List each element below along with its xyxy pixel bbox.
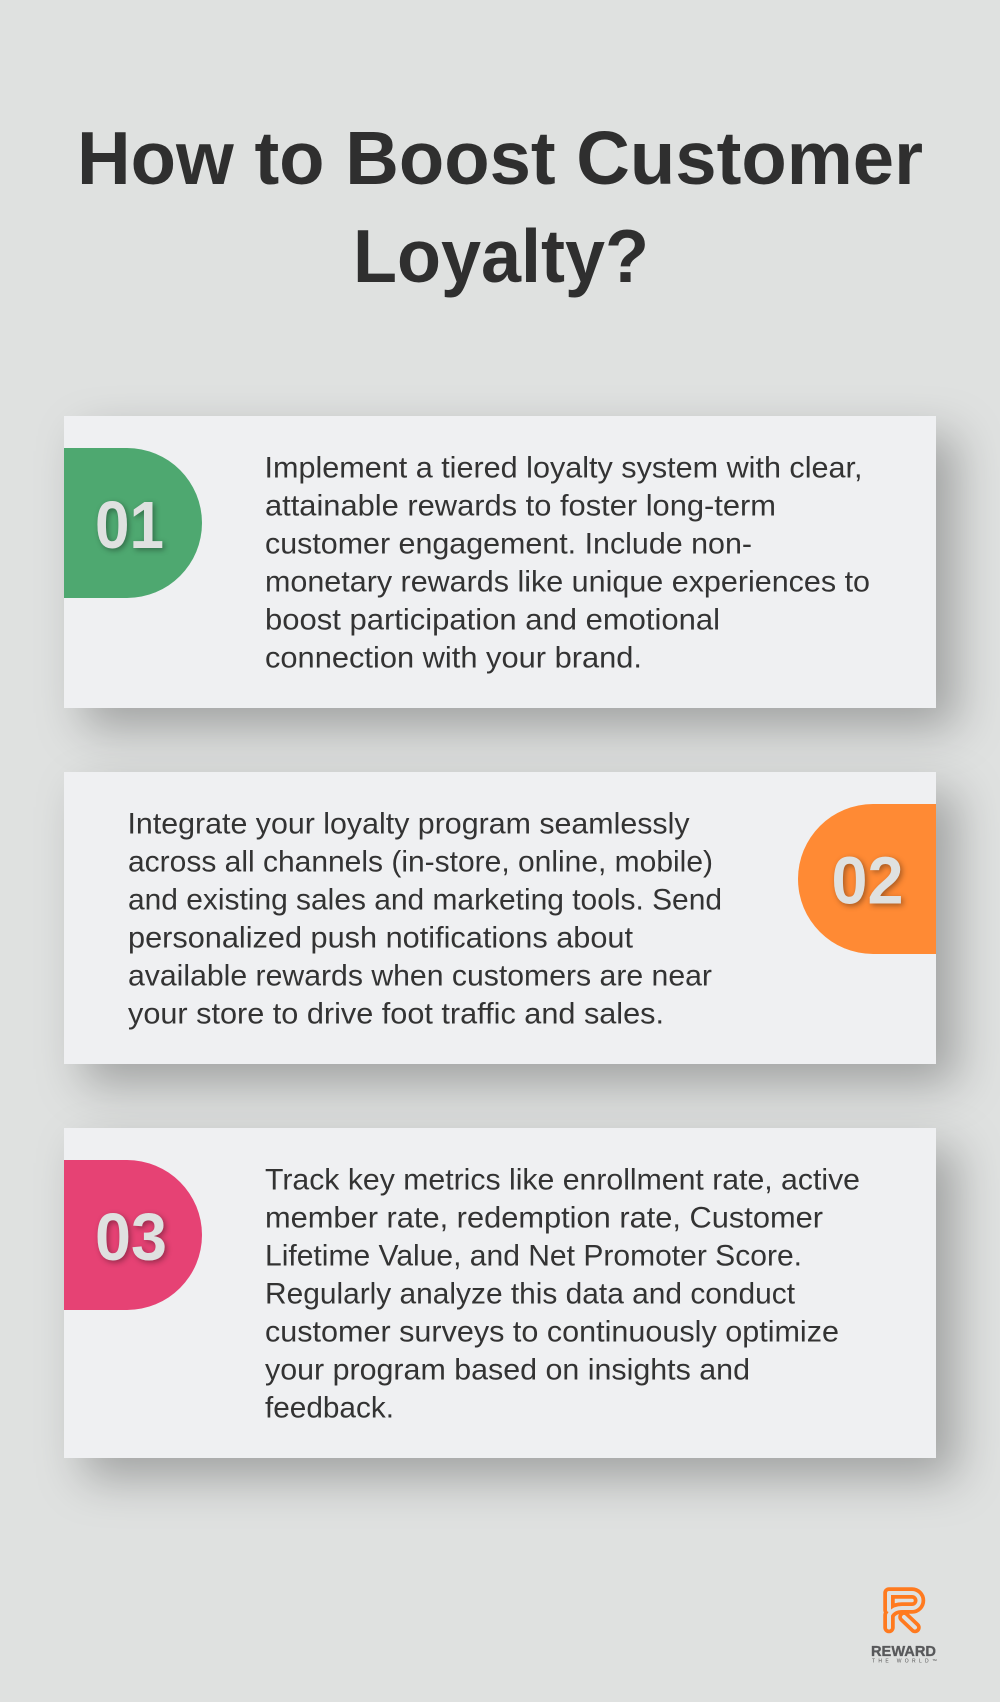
icon: orange R mark [889, 1593, 920, 1628]
title: Loyalty? [353, 214, 649, 298]
step 01 text: Implement a tiered loyalty system with clear, [264, 452, 862, 484]
step 02 text: Integrate your loyalty program seamlessly [128, 808, 690, 840]
step 03 text: member rate, redemption rate, Customer [265, 1202, 823, 1234]
step 03 text: feedback. [265, 1392, 394, 1424]
logo: Reward the World [871, 1593, 937, 1664]
step 02 text: and existing sales and marketing tools. Send [128, 884, 722, 916]
step 03 number badge [64, 1160, 202, 1310]
step 02 text: your store to drive foot traffic and sales. [128, 998, 664, 1030]
step 02 number badge [798, 804, 936, 954]
panel: step 03 [64, 1128, 936, 1458]
step 03 text: customer surveys to continuously optimize [265, 1316, 839, 1348]
step 02 text [128, 808, 722, 1030]
step 01 text [264, 452, 870, 674]
step 01 text: monetary rewards like unique experiences to [265, 566, 870, 598]
step 03 text: Track key metrics like enrollment rate, active [265, 1164, 860, 1196]
title [77, 116, 923, 298]
step 03 number badge: 03 [95, 1200, 167, 1275]
step 03 text: your program based on insights and [265, 1354, 750, 1386]
step 01 text: boost participation and emotional [265, 604, 720, 636]
step 01 text: customer engagement. Include non- [265, 528, 752, 560]
step 03 text: Regularly analyze this data and conduct [265, 1278, 795, 1310]
step 02 text: personalized push notifications about [128, 922, 633, 954]
panel: step 01 [64, 416, 936, 708]
step 01 text: attainable rewards to foster long-term [265, 490, 776, 522]
step 01 number badge [64, 448, 202, 598]
step 02 number badge: 02 [832, 844, 904, 918]
step 02 text: available rewards when customers are near [128, 960, 712, 992]
step 01 text: connection with your brand. [265, 642, 642, 674]
step 02 text: across all channels (in-store, online, mobile) [128, 846, 713, 878]
title: How to Boost Customer [77, 116, 923, 200]
panel: step 02 [64, 772, 936, 1064]
logo tagline: THE WORLD™ [872, 1658, 937, 1664]
step 03 text: Lifetime Value, and Net Promoter Score. [265, 1240, 802, 1272]
step 01 number badge: 01 [95, 488, 164, 563]
logo wordmark: REWARD [871, 1644, 936, 1660]
step 03 text [265, 1164, 860, 1424]
